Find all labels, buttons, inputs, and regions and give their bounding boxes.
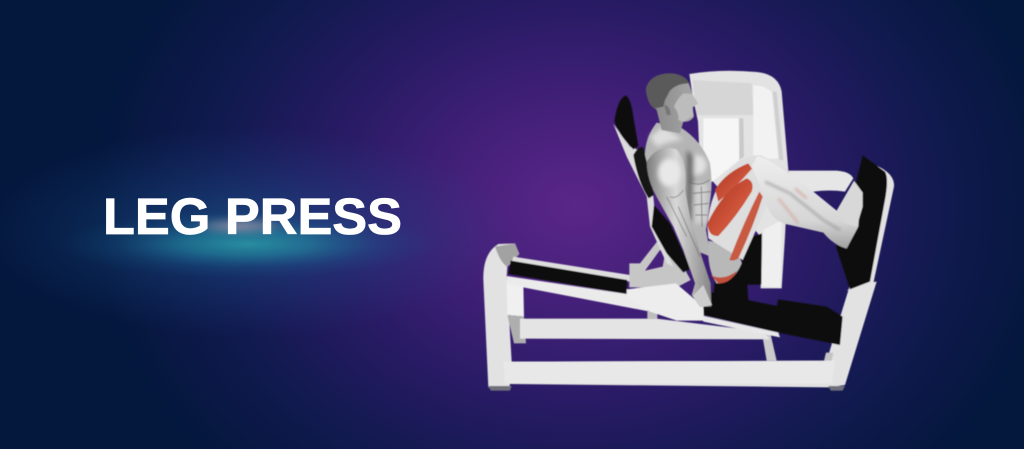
machine: main frame bbox=[483, 243, 877, 391]
machine: seat base and carriage bbox=[627, 233, 843, 345]
figure: torso bbox=[645, 123, 712, 257]
machine: foot plate bbox=[788, 155, 894, 291]
machine: rear lower post bbox=[647, 307, 657, 319]
figure: hip bbox=[708, 241, 742, 283]
machine: lower rail bbox=[507, 276, 703, 321]
title: LEG PRESS bbox=[103, 188, 402, 245]
figure: arm bbox=[647, 148, 711, 307]
leg press illustration bbox=[483, 71, 894, 391]
machine: middle crossbar bbox=[520, 319, 770, 339]
machine: black rail bbox=[508, 261, 627, 294]
machine: back pads bbox=[633, 147, 691, 273]
figure: hand bbox=[693, 285, 712, 307]
figure: thigh bbox=[707, 155, 788, 260]
figure: abs lines bbox=[688, 180, 711, 227]
figure: foot bbox=[837, 181, 863, 227]
machine: seat support frame bbox=[629, 240, 691, 287]
machine: upper rail white edge bbox=[512, 257, 630, 282]
machine: seat back panel bbox=[689, 71, 788, 288]
figure: chest shading bbox=[650, 127, 707, 223]
figure: lower legs bbox=[752, 156, 860, 249]
machine: head pad bbox=[614, 95, 638, 149]
figure: head bbox=[646, 73, 698, 133]
title glow bbox=[0, 127, 515, 337]
machine: back frame bbox=[613, 124, 673, 267]
figure: quadriceps muscles bbox=[707, 163, 763, 261]
